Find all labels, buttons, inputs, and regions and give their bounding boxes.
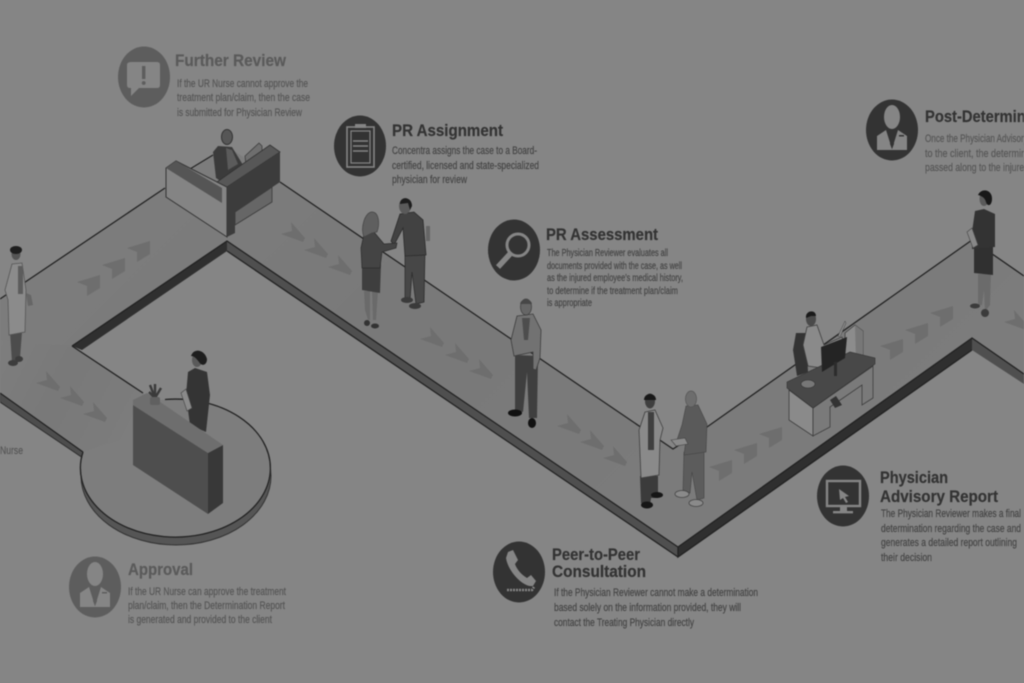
description: The Physician Reviewer evaluates all xyxy=(547,248,668,259)
icon: telephone xyxy=(493,542,545,602)
heading: Approval xyxy=(128,560,193,579)
figures: handshake pair xyxy=(361,198,430,328)
description: treatment plan/claim, then the case xyxy=(177,92,310,104)
heading: Physician xyxy=(880,468,948,487)
description xyxy=(881,508,1021,564)
icon: clipboard xyxy=(334,116,386,176)
description: If the UR Nurse can approve the treatment xyxy=(128,586,286,598)
figure: nurse in white coat xyxy=(5,246,33,366)
isometric walkway xyxy=(0,146,1024,557)
callout: Post-Determination xyxy=(866,100,1024,174)
callout: Further Review xyxy=(118,46,310,119)
reception counter with woman and plant xyxy=(133,351,223,514)
description: Concentra assigns the case to a Board- xyxy=(392,145,537,157)
heading: PR Assignment xyxy=(392,121,503,140)
figure: woman with folder xyxy=(967,190,995,317)
description: certified, licensed and state-specialized xyxy=(392,160,539,172)
heading xyxy=(880,468,998,506)
clipped label: Nurse: Nurse xyxy=(0,445,23,457)
heading: Advisory Report xyxy=(880,487,998,506)
reception desk with seated clerk xyxy=(166,130,280,237)
description: to determine if the treatment plan/claim xyxy=(547,286,678,297)
callout: Physician Advisory Report xyxy=(817,466,1021,564)
description: documents provided with the case, as well xyxy=(547,261,682,272)
description: as the injured employee’s medical history, xyxy=(547,273,683,284)
figures: peer-to-peer physicians xyxy=(639,391,707,508)
description: is appropriate xyxy=(547,298,592,309)
icon: speech bubble with exclamation xyxy=(118,46,170,108)
description: If the Physician Reviewer cannot make a determination xyxy=(554,587,758,599)
icon: person in suit xyxy=(69,556,121,618)
description: contact the Treating Physician directly xyxy=(554,617,694,629)
figure: physician reviewer standing xyxy=(508,299,541,428)
description: is submitted for Physician Review xyxy=(177,107,302,119)
callout: Approval xyxy=(69,556,286,626)
description: plan/claim, then the Determination Report xyxy=(128,600,285,612)
description: is generated and provided to the client xyxy=(128,614,272,626)
callout: PR Assessment xyxy=(488,220,683,309)
description: their decision xyxy=(881,552,932,564)
description xyxy=(554,587,758,629)
heading: Further Review xyxy=(175,51,287,70)
flow arrows xyxy=(36,222,1024,481)
icon: computer monitor xyxy=(817,466,869,526)
heading: PR Assessment xyxy=(546,225,658,244)
description xyxy=(128,586,286,626)
heading: Consultation xyxy=(552,562,646,581)
icon: person in suit xyxy=(866,100,918,160)
callout: Peer-to-Peer Consultation xyxy=(493,542,758,629)
office desk with seated physician xyxy=(787,311,875,436)
description: based solely on the information provided, they will xyxy=(554,602,741,614)
heading: Peer-to-Peer xyxy=(552,545,640,564)
description xyxy=(925,133,1024,174)
description xyxy=(547,248,683,309)
description xyxy=(177,78,310,119)
description: physician for review xyxy=(392,174,467,186)
icon: magnifying glass xyxy=(488,220,540,280)
description: If the UR Nurse cannot approve the xyxy=(177,78,308,90)
callout: PR Assignment xyxy=(334,116,539,186)
description xyxy=(392,145,539,186)
heading xyxy=(552,545,646,581)
